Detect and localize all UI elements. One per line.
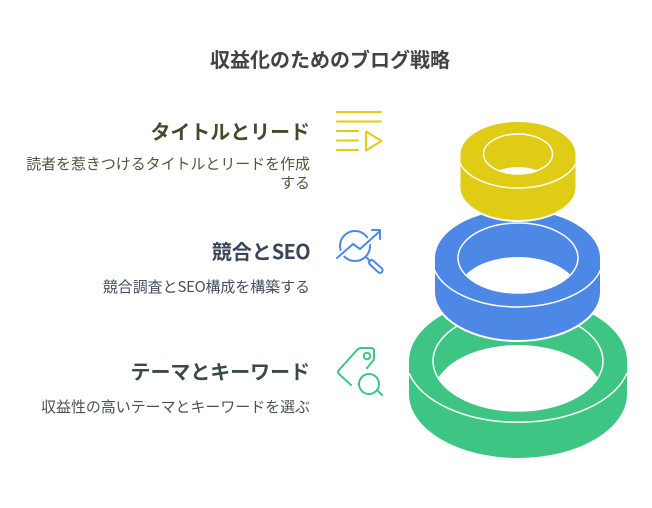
ring: green [409,314,627,458]
icon: price tag with magnifier [338,348,382,395]
icon: chart arrow with magnifier [337,230,383,273]
heading: テーマとキーワード: テーマとキーワード [131,356,310,385]
text: タイトルとリード description: 読者を惹きつけるタイトルとリードを作成する [26,153,310,193]
text: テーマとキーワード description: 収益性の高いテーマとキーワードを選ぶ [41,396,310,417]
heading: タイトルとリード: タイトルとリード [150,116,310,145]
ring: blue [434,209,601,341]
text: 競合とSEO description: 競合調査とSEO構成を構築する [103,276,310,297]
icon: text lines with play triangle [337,112,382,150]
ring: yellow [460,121,576,221]
heading: 競合とSEO: 競合とSEO [212,236,310,265]
title: 収益化のためのブログ戦略 [210,44,450,73]
